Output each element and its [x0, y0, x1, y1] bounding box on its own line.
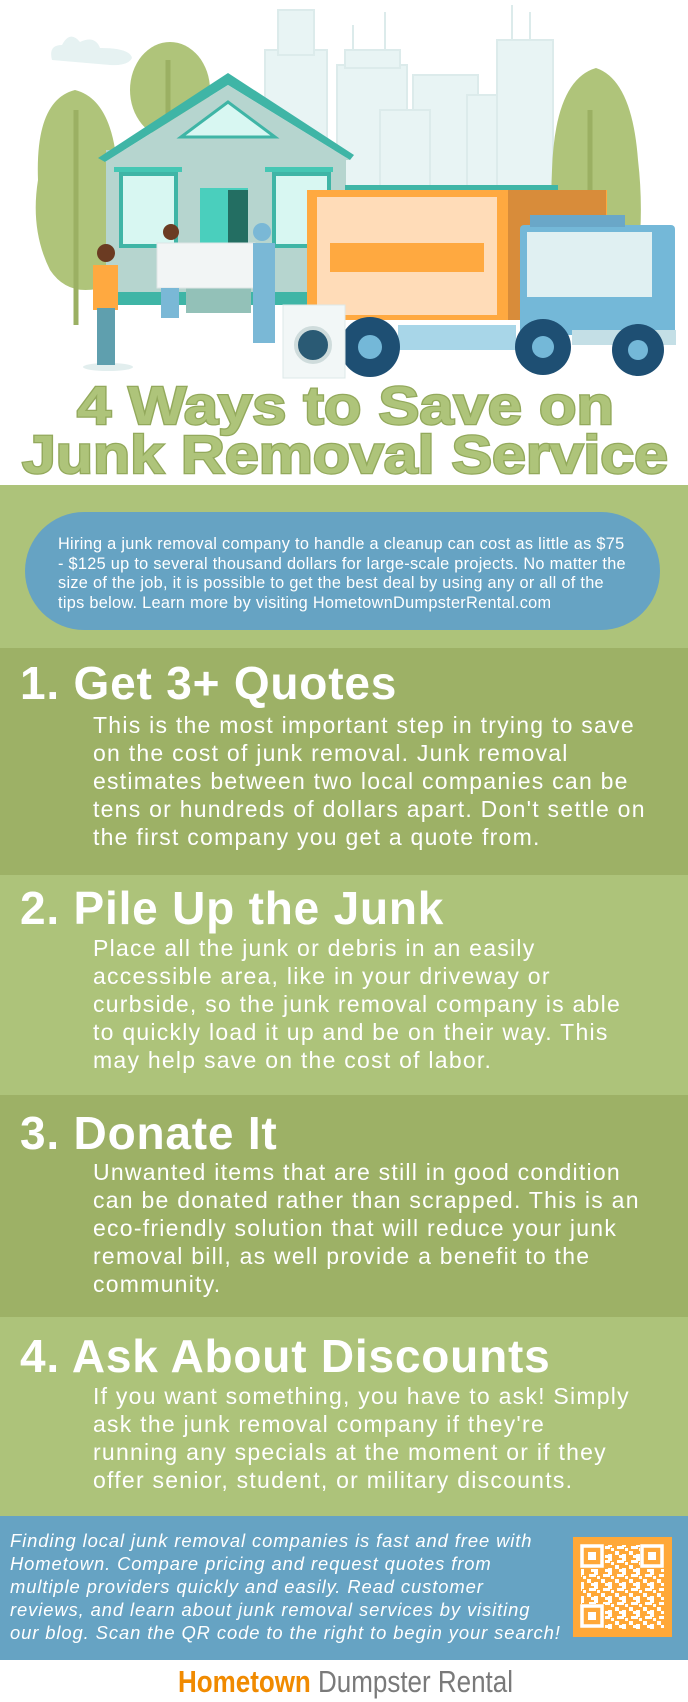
heading 2: 2. Pile Up the Junk — [20, 882, 444, 934]
text 2: to quickly load it up and be on their way. This — [93, 1019, 609, 1045]
text 1: estimates between two local companies can be — [93, 768, 629, 794]
illustration: house, movers and truck — [21, 5, 676, 485]
text 4: running any specials at the moment or if they — [93, 1439, 607, 1465]
intro ellipse — [25, 512, 660, 630]
text 4: If you want something, you have to ask! Simply — [93, 1383, 630, 1409]
movers — [83, 223, 275, 371]
text 2: may help save on the cost of labor. — [93, 1047, 492, 1073]
footer text — [10, 1530, 561, 1643]
cloud — [51, 37, 132, 65]
text 2 — [93, 935, 621, 1073]
text 1: tens or hundreds of dollars apart. Don't settle on — [93, 796, 646, 822]
intro text: size of the job, it is possible to get the best deal by using any or all of the — [58, 574, 604, 592]
panel: tip 4 — [0, 1317, 688, 1516]
text 2: curbside, so the junk removal company is able — [93, 991, 621, 1017]
heading 3: 3. Donate It — [20, 1107, 278, 1159]
panel: tip 1 — [0, 648, 688, 875]
panel: tip 2 — [0, 875, 688, 1095]
footer text: Hometown. Compare pricing and request quotes from — [10, 1553, 492, 1574]
text 1: This is the most important step in trying to save — [93, 712, 635, 738]
footer text: Finding local junk removal companies is fast and free with — [10, 1530, 532, 1551]
intro text: tips below. Learn more by visiting HometownDumpsterRental.com — [58, 594, 551, 612]
intro text — [58, 535, 626, 612]
title: Junk Removal Service — [22, 425, 668, 485]
icon: QR code — [573, 1537, 672, 1637]
intro text: - $125 up to several thousand dollars for large-scale projects. No matter the — [58, 554, 626, 572]
text 3: can be donated rather than scrapped. This is an — [93, 1187, 640, 1213]
trees — [36, 42, 641, 296]
footer panel — [0, 1516, 688, 1660]
text 1: on the cost of junk removal. Junk removal — [93, 740, 569, 766]
footer text: reviews, and learn about junk removal services by visiting — [10, 1599, 530, 1620]
intro panel — [0, 485, 688, 648]
truck — [307, 185, 676, 377]
title: 4 Ways to Save on — [77, 376, 614, 436]
text 2: Place all the junk or debris in an easily — [93, 935, 535, 961]
text 2: accessible area, like in your driveway or — [93, 963, 551, 989]
text 1 — [93, 712, 646, 850]
text 3: community. — [93, 1271, 221, 1297]
city buildings — [265, 5, 553, 200]
logo: Hometown Dumpster Rental — [178, 1664, 513, 1699]
house — [98, 73, 354, 313]
text 3 — [93, 1159, 640, 1297]
title — [22, 376, 668, 485]
text 3: removal bill, as well provide a benefit to the — [93, 1243, 590, 1269]
footer text: multiple providers quickly and easily. Read customer — [10, 1576, 484, 1597]
text 4: ask the junk removal company if they're — [93, 1411, 545, 1437]
text 1: the first company you get a quote from. — [93, 824, 541, 850]
washing machine — [283, 305, 345, 378]
text 3: eco-friendly solution that will reduce your junk — [93, 1215, 617, 1241]
heading 4: 4. Ask About Discounts — [20, 1330, 550, 1382]
text 3: Unwanted items that are still in good condition — [93, 1159, 621, 1185]
text 4: offer senior, student, or military discounts. — [93, 1467, 573, 1493]
intro text: Hiring a junk removal company to handle a cleanup can cost as little as $75 — [58, 535, 624, 553]
footer text: our blog. Scan the QR code to the right to begin your search! — [10, 1622, 561, 1643]
panel: tip 3 — [0, 1095, 688, 1317]
text 4 — [93, 1383, 630, 1493]
heading 1: 1. Get 3+ Quotes — [20, 657, 397, 709]
